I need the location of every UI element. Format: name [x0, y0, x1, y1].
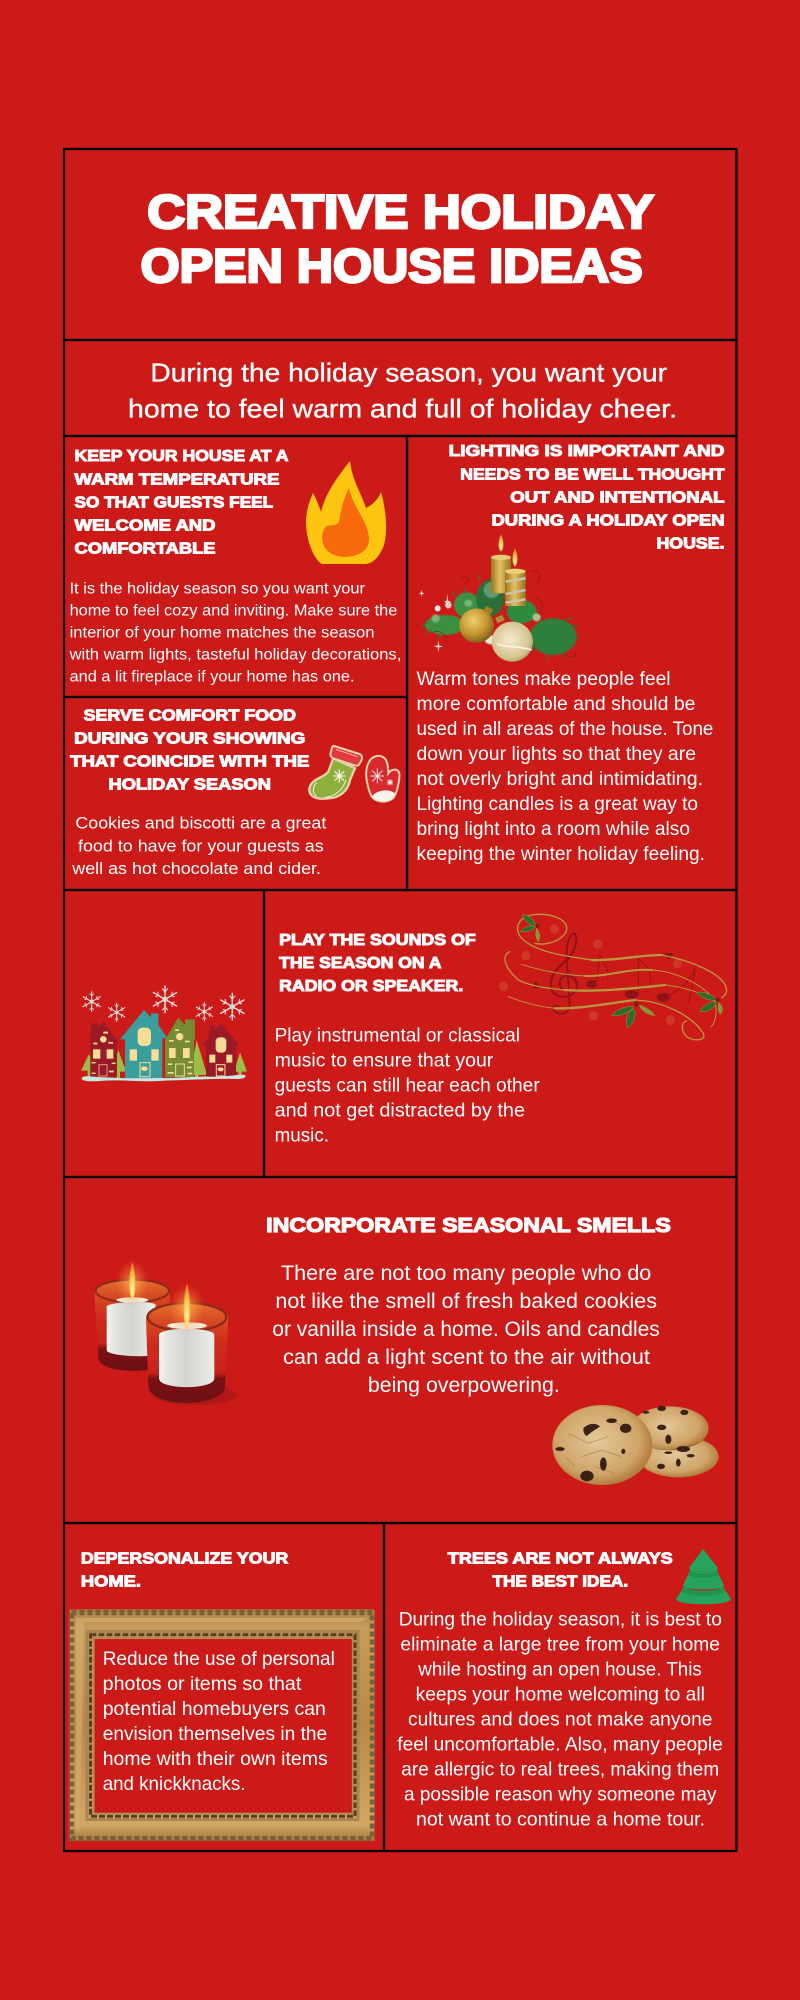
panel: warm temperature: [64, 436, 407, 697]
heading: lighting: HOUSE.: [656, 536, 724, 552]
panel: comfort food: [64, 697, 407, 890]
panel: intro: [64, 340, 736, 436]
body text: warm temperature: with warm lights, tasteful holiday decorations,: [69, 646, 401, 663]
heading: lighting: DURING A HOLIDAY OPEN: [492, 512, 724, 530]
heading: sounds of the season: [279, 932, 476, 995]
body text: depersonalize: [103, 1648, 335, 1795]
heading: sounds of the season: THE SEASON ON A: [279, 955, 442, 972]
body text: sounds of the season: [275, 1025, 540, 1147]
body text: lighting: [416, 668, 713, 865]
heading: comfort food: DURING YOUR SHOWING: [74, 730, 305, 748]
body text: lighting: keeping the winter holiday feeling.: [416, 843, 705, 865]
body text: depersonalize: Reduce the use of personal: [103, 1648, 335, 1670]
title: [141, 185, 654, 292]
heading: trees: [448, 1550, 673, 1590]
body text: trees: During the holiday season, it is best to: [399, 1609, 722, 1631]
body text: comfort food: Cookies and biscotti are a great: [75, 814, 327, 832]
body text: depersonalize: envision themselves in the: [103, 1723, 327, 1745]
body text: warm temperature: It is the holiday season so you want your: [70, 580, 365, 597]
heading: sounds of the season: PLAY THE SOUNDS OF: [279, 932, 476, 949]
icon: snowy village: [81, 986, 247, 1081]
heading: warm temperature: WELCOME AND: [74, 518, 216, 534]
heading: lighting: LIGHTING IS IMPORTANT AND: [449, 443, 724, 460]
icon: stocking and mitten cookies: [309, 746, 399, 802]
body text: trees: feel uncomfortable. Also, many people: [397, 1734, 723, 1756]
panel: trees: [384, 1523, 736, 1851]
body text: sounds of the season: music.: [275, 1125, 329, 1147]
body text: sounds of the season: music to ensure that your: [275, 1050, 494, 1072]
body text: warm temperature: [69, 580, 401, 685]
heading: warm temperature: COMFORTABLE: [74, 540, 216, 558]
title: OPEN HOUSE IDEAS: [141, 239, 643, 292]
intro text: home to feel warm and full of holiday cheer.: [128, 393, 677, 423]
body text: warm temperature: and a lit fireplace if your home has one.: [70, 668, 354, 685]
body text: depersonalize: photos or items so that: [103, 1673, 302, 1695]
icon: flame: [306, 461, 386, 564]
heading: warm temperature: KEEP YOUR HOUSE AT A: [74, 448, 289, 465]
panel: title: [64, 149, 736, 340]
body text: seasonal smells: There are not too many people who do: [281, 1262, 651, 1285]
panel: lighting: [407, 436, 736, 890]
body text: trees: are allergic to real trees, making them: [401, 1759, 719, 1781]
heading: depersonalize: [81, 1550, 289, 1590]
intro text: [128, 358, 677, 423]
body text: sounds of the season: Play instrumental or classical: [275, 1025, 520, 1047]
heading: lighting: [449, 443, 725, 552]
icon: musical staff with holly: [499, 914, 727, 1040]
heading: comfort food: THAT COINCIDE WITH THE: [70, 754, 310, 770]
icon: green tree: [676, 1549, 731, 1604]
panel: village illustration: [64, 890, 264, 1177]
body text: lighting: bring light into a room while also: [416, 818, 690, 840]
panel: seasonal smells: [64, 1177, 736, 1523]
heading: trees: THE BEST IDEA.: [492, 1574, 628, 1590]
heading: comfort food: HOLIDAY SEASON: [108, 776, 271, 794]
intro text: During the holiday season, you want your: [150, 358, 667, 388]
body text: lighting: used in all areas of the house. Tone: [416, 718, 713, 740]
body text: depersonalize: home with their own items: [103, 1748, 328, 1770]
heading: depersonalize: HOME.: [81, 1574, 141, 1590]
body text: sounds of the season: and not get distracted by the: [275, 1100, 525, 1122]
heading: seasonal smells: INCORPORATE SEASONAL SMELLS: [266, 1215, 671, 1237]
body text: trees: [397, 1609, 723, 1831]
body text: comfort food: [71, 814, 327, 878]
body text: lighting: down your lights so that they are: [416, 743, 696, 765]
body text: depersonalize: and knickknacks.: [103, 1773, 246, 1795]
body text: trees: keeps your home welcoming to all: [416, 1684, 705, 1706]
icon: glass candles: [94, 1260, 237, 1405]
body text: seasonal smells: can add a light scent to the air without: [283, 1346, 650, 1369]
heading: trees: TREES ARE NOT ALWAYS: [448, 1550, 673, 1568]
body text: depersonalize: potential homebuyers can: [103, 1698, 326, 1720]
body text: comfort food: food to have for your guests as: [78, 837, 324, 855]
heading: sounds of the season: RADIO OR SPEAKER.: [279, 978, 463, 995]
body text: lighting: Warm tones make people feel: [416, 668, 670, 690]
body text: warm temperature: interior of your home matches the season: [70, 624, 374, 641]
heading: warm temperature: WARM TEMPERATURE: [74, 472, 280, 488]
body text: trees: cultures and does not make anyone: [408, 1709, 712, 1731]
body text: seasonal smells: [272, 1262, 660, 1397]
body text: trees: eliminate a large tree from your home: [400, 1634, 720, 1656]
panel: depersonalize: [64, 1523, 384, 1851]
heading: lighting: NEEDS TO BE WELL THOUGHT: [460, 466, 725, 484]
picture frame: [70, 1609, 374, 1841]
body text: lighting: more comfortable and should be: [416, 693, 696, 715]
panel: sounds of the season: [264, 890, 736, 1177]
body text: seasonal smells: or vanilla inside a home. Oils and candles: [272, 1318, 660, 1341]
title: CREATIVE HOLIDAY: [147, 185, 654, 238]
heading: lighting: OUT AND INTENTIONAL: [510, 490, 725, 506]
heading: comfort food: [70, 708, 310, 794]
heading: comfort food: SERVE COMFORT FOOD: [84, 708, 296, 724]
body text: seasonal smells: not like the smell of fresh baked cookies: [275, 1290, 657, 1313]
icon: candles and ornaments: [419, 534, 578, 662]
body text: lighting: Lighting candles is a great way to: [416, 793, 698, 815]
icon: chocolate chip cookies: [552, 1405, 719, 1485]
body text: seasonal smells: being overpowering.: [368, 1374, 560, 1397]
body text: trees: a possible reason why someone may: [404, 1784, 717, 1806]
body text: lighting: not overly bright and intimidating.: [416, 768, 703, 790]
body text: sounds of the season: guests can still hear each other: [275, 1075, 540, 1097]
body text: trees: not want to continue a home tour.: [416, 1809, 705, 1831]
body text: comfort food: well as hot chocolate and cider.: [71, 860, 321, 878]
heading: depersonalize: DEPERSONALIZE YOUR: [81, 1550, 289, 1568]
heading: warm temperature: SO THAT GUESTS FEEL: [74, 494, 273, 512]
heading: warm temperature: [74, 448, 289, 558]
body text: trees: while hosting an open house. This: [417, 1659, 702, 1681]
body text: warm temperature: home to feel cozy and inviting. Make sure the: [70, 602, 397, 619]
